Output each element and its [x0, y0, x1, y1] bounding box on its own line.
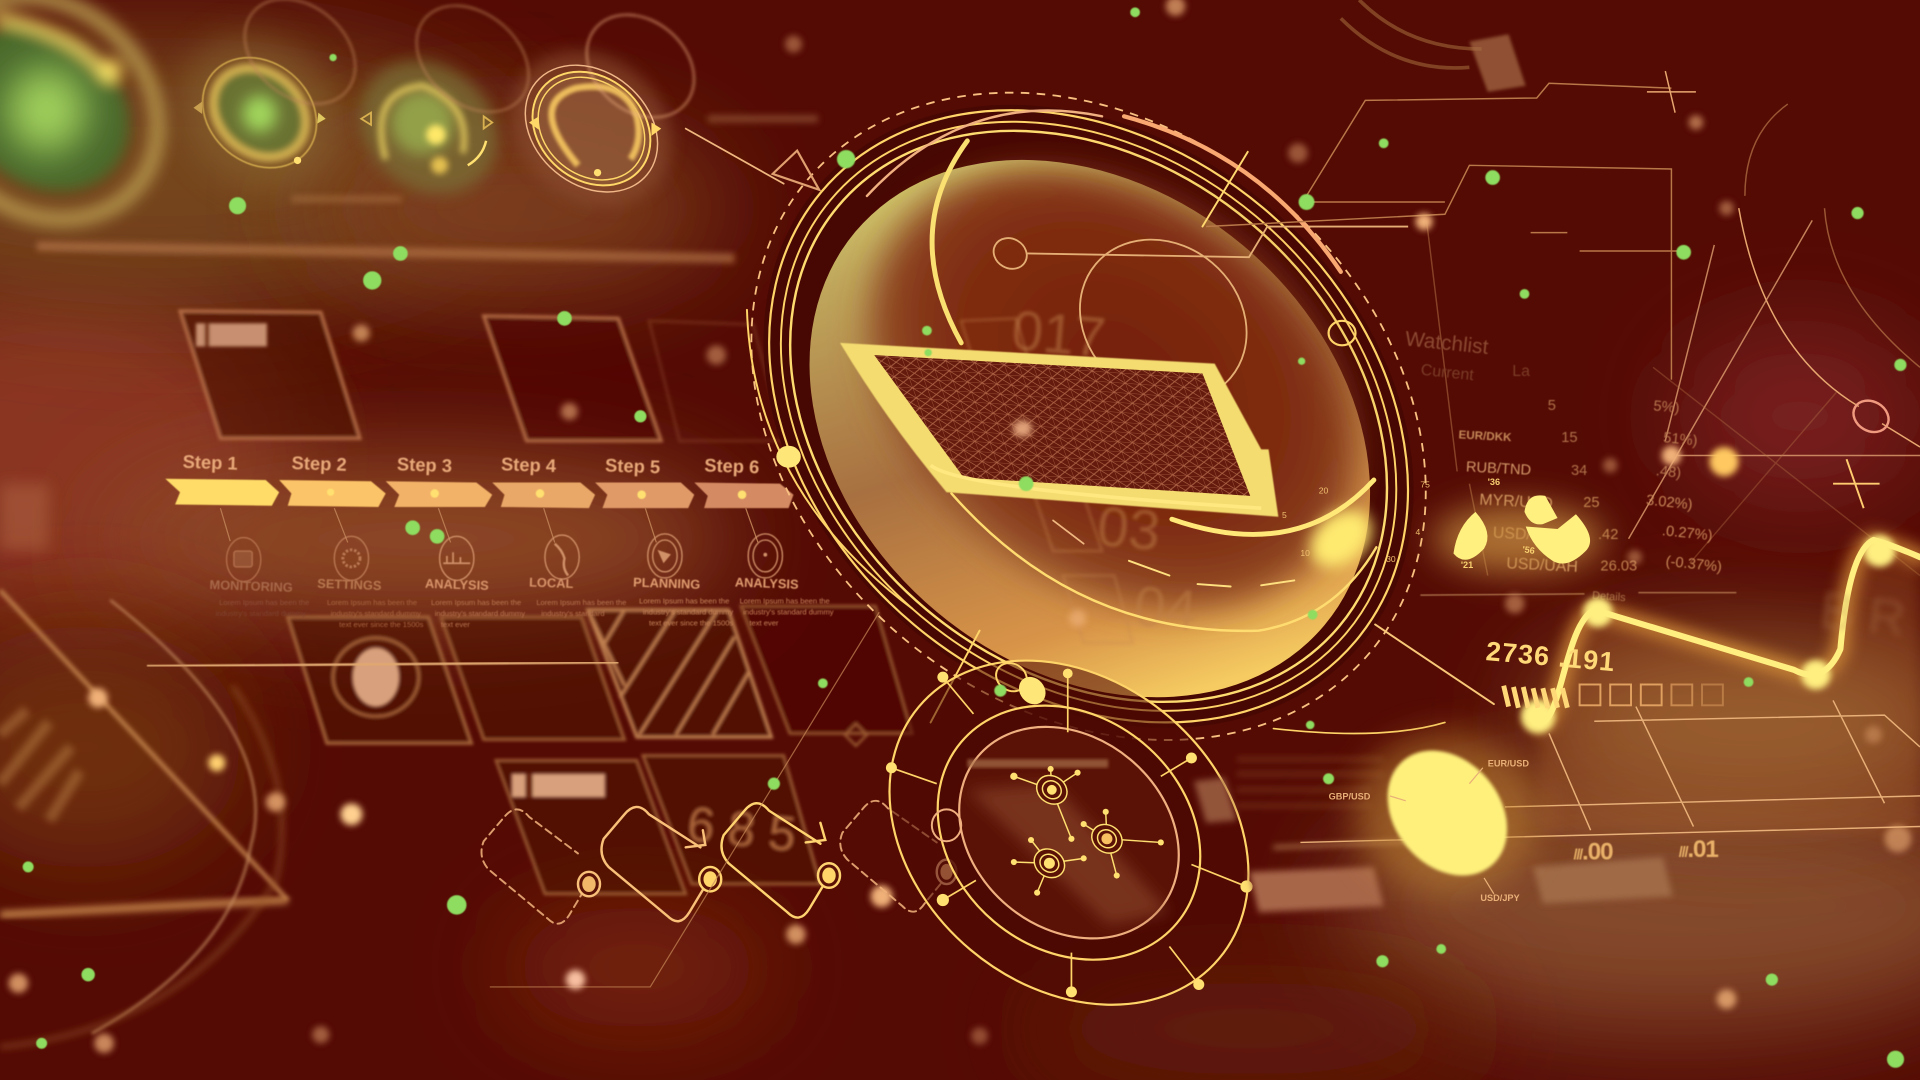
bright rim lower right [1299, 498, 1383, 580]
chart bar strip [1504, 684, 1723, 708]
panel: lower number: 6 8 5 [685, 797, 799, 862]
dial middle [886, 653, 1252, 1012]
flow step 3 [721, 803, 825, 918]
dial blur patch [967, 784, 1169, 924]
icon: settings [334, 536, 369, 580]
step descriptions: industry's standard dummy [331, 609, 421, 618]
dial spokes [891, 673, 1247, 992]
watchlist table: (-0.37%) [1665, 554, 1723, 576]
diagonal thin line [490, 612, 879, 987]
upper panels [180, 311, 784, 441]
step captions: ANALYSIS [735, 575, 799, 592]
step captions: SETTINGS [317, 576, 382, 593]
globe ghost boxes [961, 318, 1133, 643]
chevron 4 [492, 482, 595, 508]
icon: analysis [440, 536, 474, 580]
chart axis labels [1573, 836, 1718, 866]
ghost label: B R [1817, 580, 1909, 647]
panel: right [741, 606, 912, 746]
network node 1 [1010, 766, 1081, 842]
flow step dashed right [840, 801, 940, 912]
ring inner [676, 13, 1501, 820]
globe scale numbers [1282, 479, 1430, 564]
dial: large green [0, 0, 203, 265]
chevron 3 [386, 481, 492, 507]
globe scale numbers: 5 [1282, 510, 1287, 520]
watchlist table: USD/UAH [1506, 555, 1578, 576]
panel: lower tag [496, 760, 686, 894]
flow step dashed left [481, 809, 584, 924]
globe body [702, 49, 1478, 808]
globe accent arcs [686, 110, 1494, 733]
globe scale numbers: 75 [1420, 479, 1430, 489]
process flow diamonds [481, 801, 956, 924]
watchlist table: .0.27%) [1661, 523, 1713, 544]
step descriptions: industry's standard dummy [216, 609, 306, 618]
chart axis labels: ///.00 [1573, 839, 1613, 866]
panel: upper right faint [649, 321, 784, 441]
step descriptions: Lorem Ipsum has been the [536, 598, 626, 607]
network node 3 [1011, 837, 1087, 896]
chevron 5 [595, 482, 694, 508]
dial nodes [886, 669, 1253, 997]
pie chart: '21 [1461, 560, 1473, 570]
globe ring handle dot [776, 446, 801, 468]
step descriptions [216, 597, 834, 629]
step descriptions: industry's standard [541, 609, 605, 618]
pie chart [1433, 477, 1604, 573]
globe inner ghost numbers: 017 [1009, 298, 1108, 369]
step descriptions: Lorem Ipsum has been the [327, 598, 417, 607]
dark halo [639, 0, 1538, 857]
chip mesh panel [840, 343, 1278, 517]
currency disc [1329, 727, 1539, 903]
step descriptions: industry's standard dummy [743, 608, 834, 617]
chevron 2 [279, 480, 386, 507]
step descriptions: Lorem Ipsum has been the [740, 597, 830, 606]
chevron dots and leader lines [220, 489, 758, 542]
step descriptions: Lorem Ipsum has been the [639, 597, 729, 606]
step captions: MONITORING [209, 577, 293, 595]
dial outer [821, 589, 1317, 1076]
lower panel grid [288, 606, 912, 894]
watchlist table: 15 [1561, 430, 1578, 446]
blurred strip bars [37, 115, 818, 263]
chart value: 2736 .191 [1485, 636, 1615, 677]
dial: green 2 [150, 5, 369, 221]
currency disc: USD/JPY [1480, 893, 1520, 903]
step descriptions: Lorem Ipsum has been the [431, 598, 521, 607]
watchlist table: RUB/TND [1466, 459, 1532, 479]
icon: local [545, 535, 579, 579]
flow step 2 [601, 807, 705, 921]
ring outer [647, 0, 1531, 849]
currency disc: EUR/USD [1488, 759, 1529, 769]
watchlist table: 51%) [1662, 430, 1698, 450]
lower right blurred blocks [1194, 759, 1673, 912]
step captions: LOCAL [529, 575, 574, 591]
globe inner ghost numbers [1009, 298, 1200, 642]
pie chart: '56 [1522, 544, 1535, 556]
watchlist table: 5 [1548, 398, 1556, 414]
main globe rings [621, 0, 1556, 874]
dial: orange 4 [480, 19, 703, 238]
step labels: Step 4 [501, 453, 557, 476]
watchlist table [1404, 327, 1736, 604]
chart grid [1300, 700, 1920, 842]
panel: upper left [180, 311, 360, 438]
dashed ring [621, 0, 1556, 874]
step labels: Step 2 [291, 452, 347, 475]
top-left radar dials [0, 0, 715, 265]
watchlist table: La [1512, 363, 1530, 380]
watchlist table: Watchlist [1404, 327, 1490, 359]
step descriptions: text ever since the 1500s [649, 619, 733, 628]
globe small ring [1329, 321, 1356, 345]
panel: upper middle [484, 316, 661, 441]
line chart [1521, 535, 1920, 833]
panel: lower number [643, 756, 820, 884]
watchlist table: 25 [1583, 495, 1600, 511]
dial inner [917, 683, 1221, 982]
chevron 1 [165, 479, 279, 506]
panel: circle [288, 617, 471, 743]
flow nodes [578, 860, 956, 896]
step captions: ANALYSIS [425, 576, 489, 593]
pie chart: '36 [1488, 477, 1500, 487]
globe scale numbers: 10 [1300, 548, 1310, 558]
watchlist table: Details [1592, 590, 1627, 604]
icon: monitoring [227, 538, 261, 582]
icon: analysis 2 [748, 534, 782, 578]
watchlist table: Current [1420, 362, 1475, 384]
upper right circuit lines [1206, 0, 1920, 576]
watchlist table: .42 [1598, 527, 1618, 543]
watchlist table: 34 [1571, 463, 1587, 479]
panel tag [196, 323, 267, 347]
watchlist table: 26.03 [1600, 559, 1637, 575]
watchlist table: 5%) [1653, 398, 1680, 417]
crosshair right [1833, 459, 1880, 508]
watchlist table: EUR/DKK [1458, 428, 1512, 444]
currency disc: GBP/USD [1329, 792, 1371, 802]
crosshair top [1647, 71, 1696, 113]
ring right [1848, 394, 1894, 438]
step descriptions: Lorem Ipsum has been the [219, 598, 309, 607]
dial top marker [932, 658, 1051, 841]
dial: green 3 [333, 33, 524, 221]
dim ring outlines [224, 0, 715, 139]
globe inner ghost numbers: 03 [1095, 494, 1163, 562]
step descriptions: text ever since the 1500s [339, 620, 424, 629]
step chevrons [165, 479, 793, 508]
panel: hatched [588, 610, 771, 737]
step captions [209, 575, 799, 595]
globe triangle marker [773, 151, 819, 190]
globe scale numbers: 20 [1319, 485, 1329, 495]
step labels: Step 5 [605, 454, 661, 477]
horizontal rule left [147, 662, 618, 666]
step descriptions: text ever [749, 619, 779, 628]
left triangle and arcs [0, 484, 288, 1047]
globe inner ghost numbers: 04 [1132, 574, 1200, 642]
chevron 6 [694, 482, 793, 508]
lower radial dial [821, 589, 1317, 1076]
step labels [182, 451, 760, 477]
icon: planning [648, 534, 682, 578]
watchlist table: USD/SEK [1492, 525, 1563, 545]
step labels: Step 6 [704, 454, 760, 477]
globe scale numbers: 4 [1416, 527, 1421, 537]
step descriptions: industry's standard dummy [643, 608, 733, 617]
globe scale numbers: 30 [1386, 554, 1396, 564]
watchlist table: .48) [1655, 463, 1682, 482]
step descriptions: industry's standard dummy [435, 609, 525, 618]
step icons [227, 534, 782, 582]
ring middle [663, 0, 1514, 833]
step labels: Step 3 [397, 453, 452, 476]
globe inner thin circles [988, 206, 1408, 436]
watchlist table: MYR/USD [1479, 492, 1553, 512]
block top right [1469, 34, 1526, 92]
network node 2 [1081, 809, 1164, 879]
panel: empty [441, 617, 624, 740]
chart axis labels: ///.01 [1679, 836, 1718, 863]
watchlist table: 3.02%) [1645, 493, 1693, 513]
step labels: Step 1 [182, 451, 238, 474]
step descriptions: text ever [441, 620, 470, 629]
step captions: PLANNING [633, 575, 701, 592]
